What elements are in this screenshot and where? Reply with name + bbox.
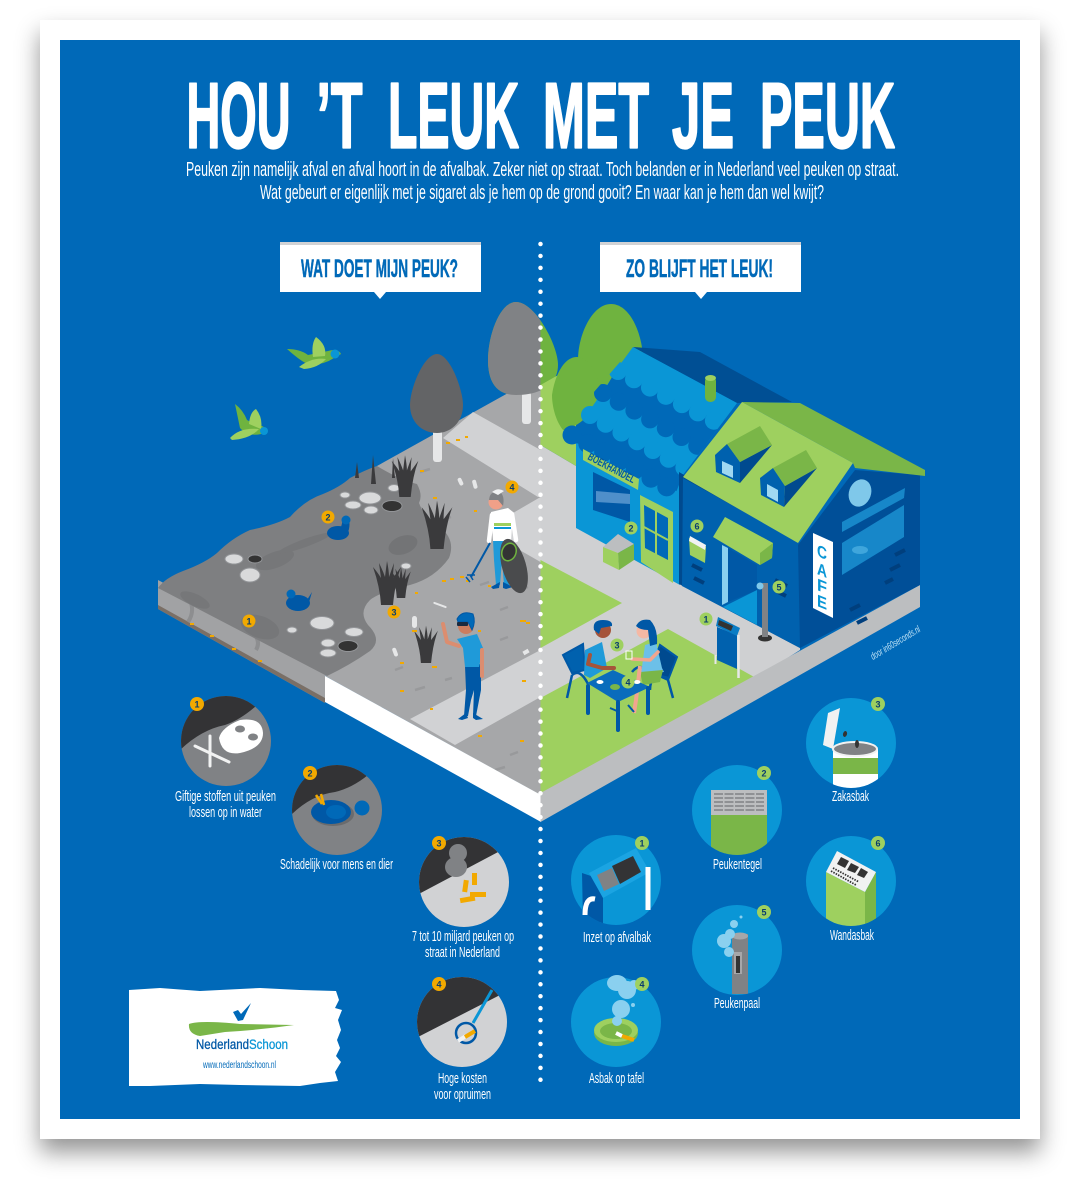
caption 3 left: straat in Nederland [425,945,500,961]
markers on left scene [242,480,518,628]
markers on left scene: 3 [391,608,397,618]
caption 3 left: 7 tot 10 miljard peuken op [412,929,514,945]
dead plants [355,455,452,663]
heading box: zo blijft het leuk: ZO BLIJFT HET LEUK! [626,255,773,283]
title: LEUK [388,64,519,168]
markers on right scene: 6 [694,522,700,532]
dormer right [760,450,817,507]
cigarette smoke and litter [392,477,530,657]
title: MET [543,64,649,168]
tree: large grey over street [488,302,540,424]
markers on left scene: 1 [246,616,252,626]
front side of water block [158,580,325,703]
logo url: www.nederlandschoon.nl [202,1060,276,1071]
large window [842,488,905,575]
caption 2 left: Schadelijk voor mens en dier [280,857,393,873]
icon: waste bin solution [571,835,661,930]
shop window [593,472,630,522]
caption 2 right: Peukentegel [713,857,762,873]
waste bin [716,617,740,678]
caption 1 left: Giftige stoffen uit peuken [175,789,276,805]
chimney [705,375,716,402]
icon: harmed duck [288,760,382,855]
tree: light green behind shop [552,357,600,430]
cafe door [722,545,757,625]
markers on right scene: 4 [625,678,631,688]
cafe sign: A [817,559,827,582]
title: HOU [186,64,290,168]
caption 4 left: voor opruimen [434,1087,491,1103]
check mark [233,1003,251,1021]
shop sign: BOEKHANDEL [586,451,637,486]
intro text [186,159,899,204]
dormer left [715,426,772,483]
woman seated [626,620,664,713]
awning [713,517,773,565]
man seated [584,620,614,678]
icon: litter picker: 4 [436,980,442,990]
green brush stroke [189,1022,294,1036]
icon: toxic skull: 1 [194,700,200,710]
icon: peukentegel [692,765,782,860]
caption 1 left: lossen op in water [189,805,262,821]
logo: NederlandSchoon [129,988,342,1086]
cafe sign: C [817,541,827,564]
markers on right scene [610,520,786,688]
cafe roof [683,402,925,543]
icon: flying bird upper [287,337,341,369]
green door [640,495,673,583]
round window [845,476,875,510]
caption 4 right: Asbak op tafel [589,1071,644,1087]
cafe sign: E [817,591,827,614]
markers on right scene: 3 [614,640,620,650]
cafe sign [813,533,833,618]
heading box: wat doet mijn peuk: WAT DOET MIJN PEUK? [301,255,458,283]
white front edge of left block [325,676,541,822]
caption 6 right: Wandasbak [830,928,874,944]
caption 5 right: Peukenpaal [714,996,760,1012]
terrace table with two people [563,620,677,730]
tree: green left of shop [578,304,643,405]
caption 4 left: Hoge kosten [438,1071,487,1087]
logo name: NederlandSchoon [196,1036,288,1052]
icon: flying bird lower [230,404,268,440]
blue poster background [60,40,1020,1119]
roof with scalloped tiles [572,347,737,493]
person: man picking up litter [466,489,533,596]
credit text: door in60seconds.nl [869,624,923,663]
chair right [632,645,677,698]
caption 1 right: Inzet op afvalbak [583,930,651,946]
icon: wandasbak: 6 [875,838,881,848]
polluted water area [158,466,451,676]
title [186,64,895,168]
markers on right scene: 2 [628,524,634,534]
icon: zakasbak: 3 [875,700,881,710]
heading box: wat doet mijn peuk [280,242,481,299]
markers on left scene: 4 [509,482,515,492]
icon: waste bin solution: 1 [639,838,645,848]
scattered cigarette butts [190,436,530,742]
caption 1 left [175,789,276,821]
markers on left scene: 2 [325,512,331,522]
person: man smoking with sunglasses [443,613,483,720]
icon: blue duck lower [286,590,312,611]
building: bookshop [572,347,792,585]
caption 3 right: Zakasbak [832,789,869,805]
table [587,670,650,730]
markers on right scene: 1 [703,614,709,624]
icon: peukenpaal: 5 [761,908,767,918]
heading box: zo blijft het leuk [600,242,801,299]
tree: green half behind dotted line [488,302,558,395]
icon: litter picker [417,977,507,1067]
icon: ashtray on table [571,975,661,1067]
peukentegel cube [603,534,634,570]
cafe sign: F [817,575,827,598]
ground plane: right side [540,365,920,822]
icon: ashtray on table: 4 [639,980,645,990]
ground plane: left grey block [325,375,540,795]
markers on right scene: 5 [776,582,782,592]
title: JE [672,64,734,168]
tree: small grey [410,354,463,462]
icon: harmed duck: 2 [307,768,313,778]
icon: zakasbak [806,697,896,788]
chair left [563,644,588,698]
icon: peukentegel: 2 [761,768,767,778]
icon: butts on street [415,835,510,927]
icon: toxic skull [181,696,271,786]
icon: blue duck upper [327,516,350,540]
building: cafe [679,402,925,648]
caption 4 left [434,1071,491,1103]
icon: butts on street: 3 [436,838,442,848]
icon: peukenpaal [692,905,782,995]
smoking pole [756,582,772,642]
caption 3 left [412,929,514,961]
title: PEUK [760,64,895,168]
wall ashtray [689,536,706,563]
floating discs in water [225,484,411,657]
shop sign [583,449,639,490]
icon: wandasbak [806,836,896,930]
title: ’T [316,64,362,168]
